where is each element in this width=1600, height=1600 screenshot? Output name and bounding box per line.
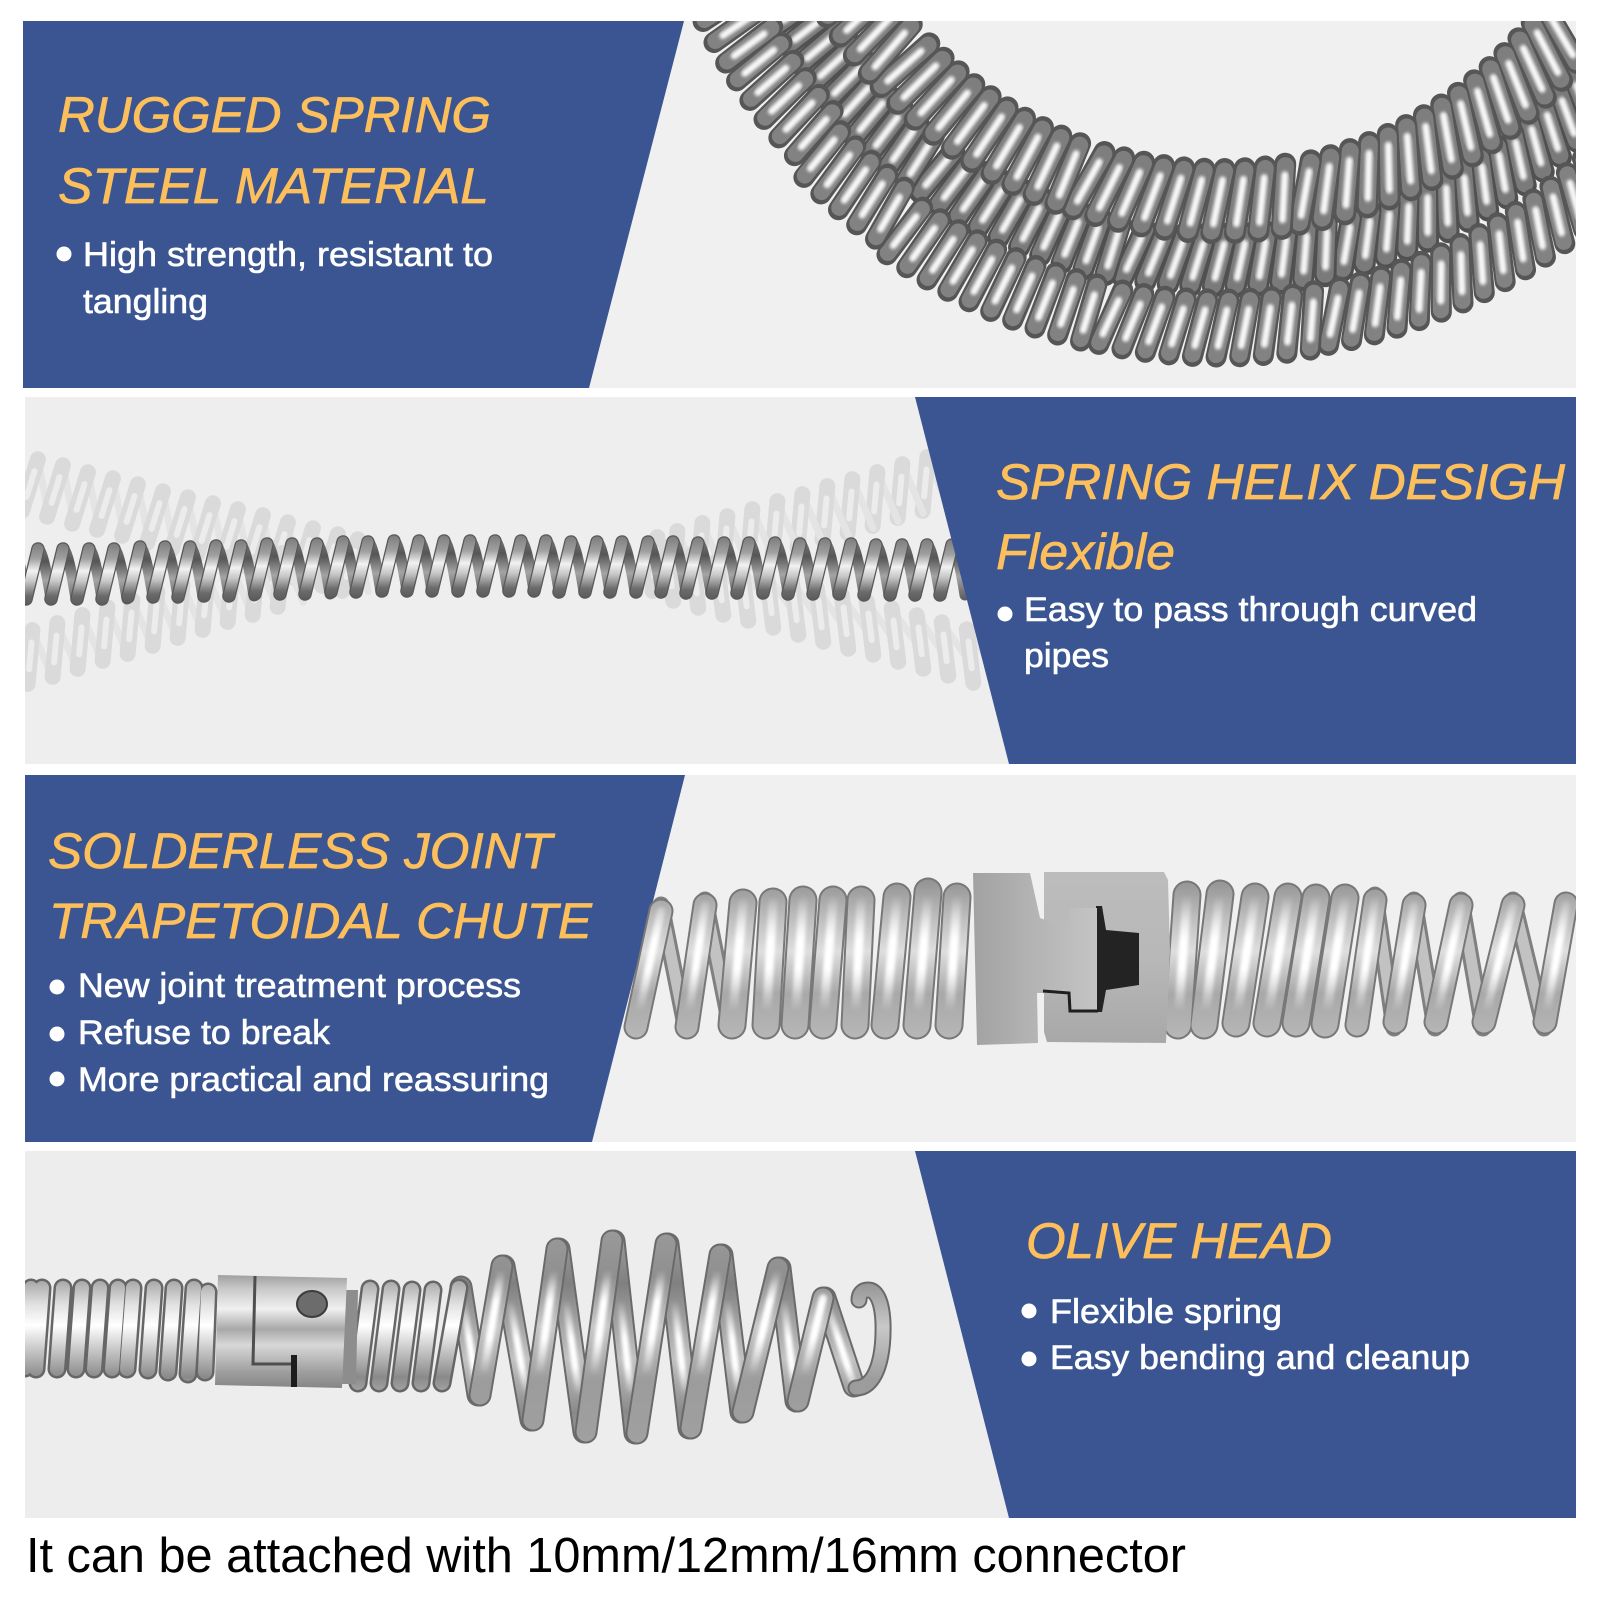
- bullet text: More practical and reassuring: [78, 1061, 549, 1099]
- bullet text: [1022, 1293, 1470, 1377]
- bullet text: New joint treatment process: [78, 967, 521, 1005]
- heading: SPRING HELIX DESIGH: [996, 454, 1566, 510]
- panel background: [25, 397, 1576, 764]
- bullet text: Easy to pass through curved: [1024, 591, 1477, 629]
- bullet text: [998, 591, 1477, 675]
- heading: SOLDERLESS JOINT: [48, 823, 556, 879]
- bullet text: [56, 236, 493, 321]
- bullet text: [50, 967, 549, 1099]
- photo: coiled spring bundle: [692, 21, 1576, 368]
- photo: connector sleeve: [215, 1275, 358, 1388]
- photo: main steel spring: [1, 541, 965, 599]
- bullet text: High strength, resistant to: [83, 236, 493, 274]
- heading: [58, 87, 491, 214]
- heading: TRAPETOIDAL CHUTE: [49, 893, 593, 949]
- bullet text: Easy bending and cleanup: [1050, 1339, 1470, 1377]
- heading: Flexible: [996, 524, 1175, 580]
- bullet text: tangling: [83, 283, 208, 321]
- footer caption: It can be attached with 10mm/12mm/16mm connector: [26, 1529, 1186, 1583]
- heading: [48, 823, 593, 949]
- photo: solderless connector: [973, 872, 1170, 1045]
- bullet text: Refuse to break: [78, 1014, 331, 1052]
- panel background: [25, 1151, 1576, 1518]
- blue text block shape: [25, 775, 685, 1142]
- heading: [996, 454, 1566, 580]
- blue text block shape: [915, 1151, 1576, 1518]
- panel: solderless joint: [25, 775, 1576, 1142]
- blue text block shape: [915, 397, 1576, 764]
- panel background: [25, 775, 1576, 1142]
- heading: RUGGED SPRING: [58, 87, 491, 143]
- photo: spring coils through joint: [636, 892, 1566, 1030]
- bullet text: pipes: [1024, 637, 1109, 675]
- photo: olive head spiral: [461, 1241, 883, 1433]
- heading: OLIVE HEAD: [1026, 1213, 1332, 1269]
- blue text block shape: [23, 21, 684, 388]
- panel: olive head: [25, 1151, 1576, 1518]
- photo: cable coils: [25, 1288, 459, 1383]
- panel: spring helix design: [1, 397, 1576, 764]
- bullet text: Flexible spring: [1050, 1293, 1282, 1331]
- photo: flexing ghost springs: [19, 455, 1022, 690]
- heading: STEEL MATERIAL: [58, 158, 489, 214]
- panel: rugged spring steel material: [23, 0, 1600, 388]
- panel background: [23, 21, 1576, 388]
